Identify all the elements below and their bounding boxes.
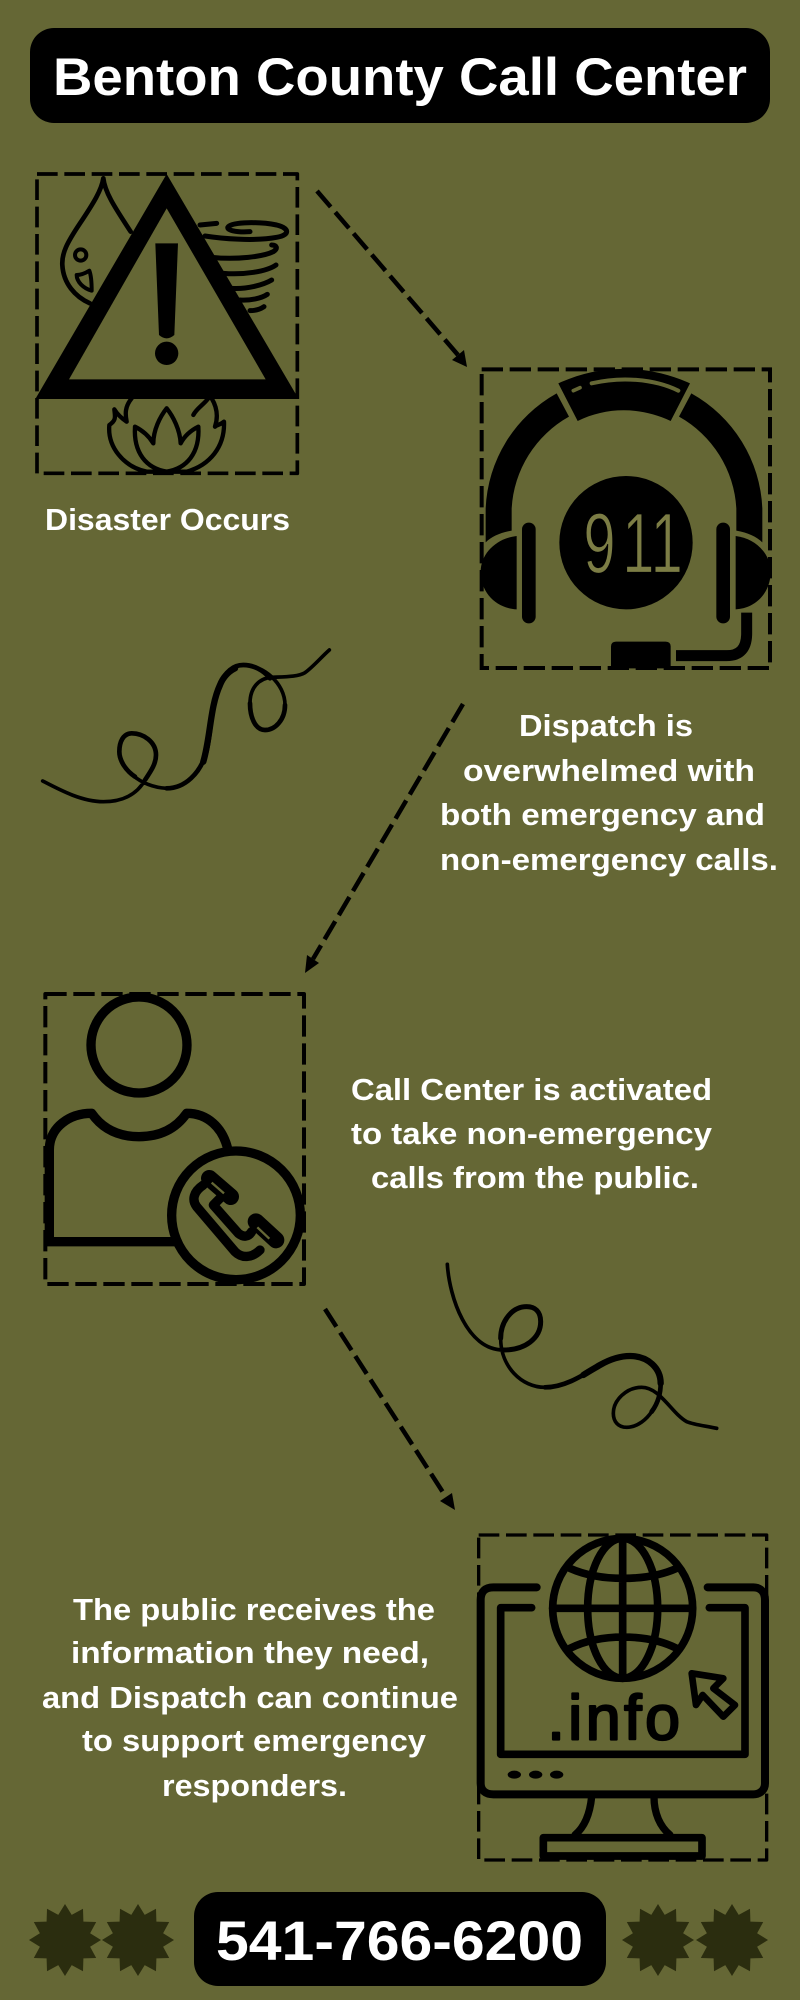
phone number banner: 541-766-6200 — [216, 1909, 583, 1972]
icon: monitor with globe: .info — [547, 1683, 680, 1753]
icon: 911 headset — [481, 369, 771, 668]
text: dispatch overwhelmed: Dispatch is — [519, 708, 693, 743]
text: call center activated: calls from the public. — [371, 1160, 699, 1195]
text: dispatch overwhelmed: both emergency and — [440, 797, 765, 832]
title banner — [30, 28, 770, 123]
text: public receives information — [42, 1592, 458, 1803]
label: disaster occurs: Disaster Occurs — [45, 502, 290, 537]
arrow: dispatch to call center — [305, 704, 463, 973]
text: public receives information: responders. — [162, 1768, 347, 1803]
decorative squiggle: right — [447, 1264, 717, 1428]
icon: disaster warning — [35, 174, 299, 473]
icon: 911 headset: 911 — [583, 496, 683, 591]
decorative stars: left pair — [29, 1904, 174, 1976]
icon: person with phone — [45, 994, 304, 1284]
arrow: call center to information — [325, 1309, 455, 1510]
text: call center activated: to take non-emergency — [351, 1116, 713, 1151]
text: dispatch overwhelmed — [440, 708, 778, 877]
title banner: Benton County Call Center — [53, 48, 747, 107]
decorative squiggle: left — [43, 650, 329, 802]
phone number banner — [194, 1892, 606, 1986]
text: public receives information: to support emergency — [82, 1723, 427, 1758]
text: dispatch overwhelmed: non-emergency calls. — [440, 842, 778, 877]
text: call center activated: Call Center is activated — [351, 1072, 712, 1107]
text: call center activated — [351, 1072, 713, 1195]
text: public receives information: and Dispatch can continue — [42, 1680, 458, 1715]
arrow: disaster to dispatch — [317, 191, 467, 367]
decorative stars: right pair — [622, 1904, 768, 1976]
text: public receives information: information they need, — [71, 1635, 429, 1670]
text: public receives information: The public receives the — [73, 1592, 435, 1627]
text: dispatch overwhelmed: overwhelmed with — [463, 753, 755, 788]
icon: monitor with globe — [479, 1535, 767, 1860]
